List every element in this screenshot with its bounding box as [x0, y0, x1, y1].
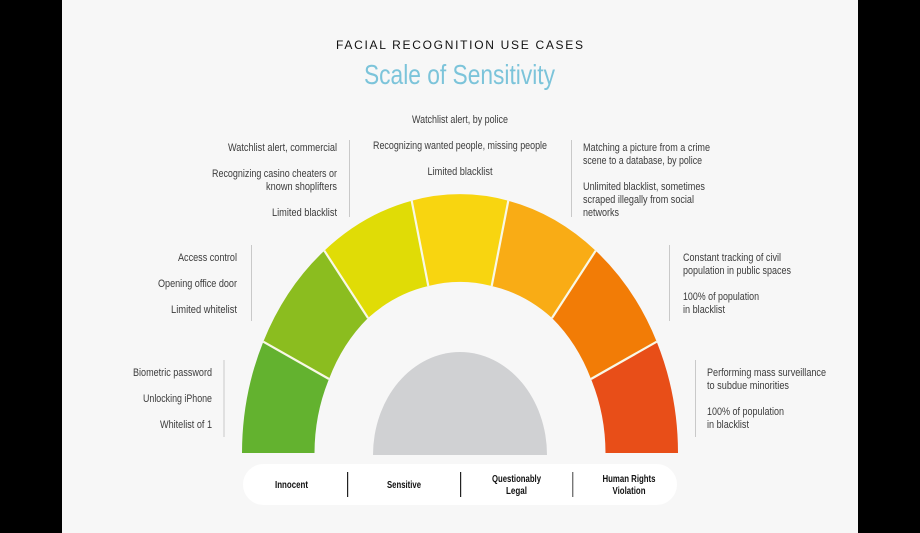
- text block: commercial watchlist, upper left: [212, 140, 350, 219]
- text block: commercial watchlist, upper left: Watchlist alert, commercial: [228, 142, 337, 154]
- text block: police watchlist, top centre: [373, 114, 547, 178]
- text block: mass surveillance, lower right: Performing mass surveillance: [707, 367, 826, 379]
- legend label: Questionably Legal: [492, 473, 541, 497]
- semicircular sensitivity gauge: [242, 194, 678, 453]
- text block: mass surveillance, lower right: 100% of population: [707, 406, 784, 418]
- text block: commercial watchlist, upper left: Limited blacklist: [272, 207, 337, 219]
- gauge segment 4: yellow: [412, 194, 508, 286]
- text block: police watchlist, top centre: Watchlist alert, by police: [412, 114, 508, 126]
- legend label: Questionably Legal: Questionably: [492, 473, 541, 485]
- text block: constant tracking, middle right: Constant tracking of civil: [683, 252, 781, 264]
- text block: constant tracking, middle right: 100% of population: [683, 291, 759, 303]
- legend label: Sensitive: Sensitive: [387, 479, 421, 491]
- gauge segment 6: orange: [552, 251, 657, 379]
- text block: police watchlist, top centre: Recognizing wanted people, missing people: [373, 140, 547, 152]
- text block: crime scene matching, upper right: Unlimited blacklist, sometimes: [583, 181, 705, 193]
- gauge segment 7: red-orange: [591, 342, 678, 453]
- text block: crime scene matching, upper right: networks: [583, 207, 619, 219]
- legend label: Human Rights Violation: Violation: [612, 485, 646, 497]
- text block: crime scene matching, upper right: scene to a database, by police: [583, 155, 702, 167]
- gauge segment 3: yellow-green: [324, 201, 428, 318]
- text block: police watchlist, top centre: Limited blacklist: [428, 166, 492, 178]
- text block: mass surveillance, lower right: in blacklist: [707, 419, 749, 431]
- gauge segment 1: green: [242, 342, 329, 453]
- text block: crime scene matching, upper right: [571, 140, 710, 219]
- gauge segment 2: lime: [263, 251, 368, 379]
- grey inner dome: [373, 352, 547, 455]
- subtitle: Scale of Sensitivity: [364, 59, 555, 90]
- text block: mass surveillance, lower right: [695, 360, 826, 437]
- text block: access uses, middle left: Access control: [178, 252, 237, 264]
- text block: access uses, middle left: Limited whitelist: [171, 304, 237, 316]
- text block: crime scene matching, upper right: scraped illegally from social: [583, 194, 694, 206]
- text block: innocent uses, lower left: Whitelist of 1: [160, 419, 212, 431]
- gauge segment 5: amber: [492, 201, 596, 318]
- text block: innocent uses, lower left: Unlocking iPhone: [143, 393, 212, 405]
- text block: innocent uses, lower left: [133, 360, 224, 437]
- text block: mass surveillance, lower right: to subdue minorities: [707, 380, 789, 392]
- text block: access uses, middle left: Opening office door: [158, 278, 237, 290]
- text block: innocent uses, lower left: Biometric password: [133, 367, 212, 379]
- text block: commercial watchlist, upper left: known shoplifters: [266, 181, 337, 193]
- legend label: Human Rights Violation: Human Rights: [602, 473, 656, 485]
- text block: crime scene matching, upper right: Matching a picture from a crime: [583, 142, 710, 154]
- text block: access uses, middle left: [158, 245, 252, 321]
- legend bar: [243, 464, 677, 505]
- legend label: Innocent: Innocent: [275, 479, 308, 491]
- text block: constant tracking, middle right: in blacklist: [683, 304, 725, 316]
- text block: commercial watchlist, upper left: Recognizing casino cheaters or: [212, 168, 337, 180]
- legend label: Questionably Legal: Legal: [506, 485, 527, 497]
- text block: constant tracking, middle right: population in public spaces: [683, 265, 791, 277]
- text block: constant tracking, middle right: [669, 245, 791, 321]
- legend label: Human Rights Violation: [602, 473, 656, 497]
- title: FACIAL RECOGNITION USE CASES: [336, 38, 583, 52]
